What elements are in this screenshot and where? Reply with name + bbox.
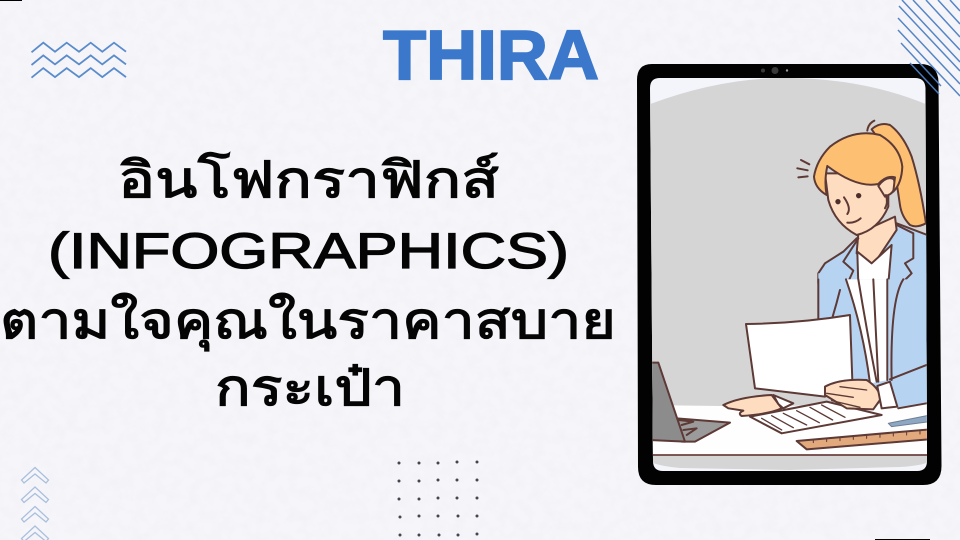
ponytail: [867, 121, 926, 226]
surprise marks: [797, 160, 809, 177]
heading line 4: กระเป๋า: [215, 360, 405, 416]
left hand: [723, 395, 782, 416]
paper: [746, 315, 852, 397]
icon: chevrons: [22, 468, 48, 540]
heading text: [0, 152, 616, 416]
lapels: [843, 225, 913, 282]
jacket: [818, 223, 930, 283]
collar: [857, 245, 892, 284]
face: [825, 173, 888, 235]
tablet frame: [637, 64, 942, 485]
shirt cuff: [877, 382, 897, 408]
title: THIRA: THIRA: [383, 16, 599, 94]
right hand: [825, 380, 880, 409]
ruler: [797, 429, 930, 449]
eyes and mouth: [835, 199, 841, 204]
neck: [857, 217, 897, 265]
jacket lower: [818, 279, 932, 408]
grey backdrop: [645, 78, 935, 470]
tablet camera: [761, 67, 788, 74]
ear: [878, 178, 895, 197]
pen: [888, 415, 930, 427]
laptop: [677, 418, 730, 442]
icon: dot grid: [398, 460, 478, 536]
heading line 1: อินโฟกราฟิกส์: [118, 152, 499, 208]
shirt: [846, 279, 888, 383]
icon: wave lines: [32, 43, 126, 78]
document on desk: [750, 402, 882, 433]
decorative diagonal lines: [898, 0, 960, 96]
heading line 3: ตามใจคุณในราคาสบาย: [0, 293, 616, 351]
desk: [645, 403, 935, 455]
woman: [797, 121, 932, 284]
tablet screen illustration: [645, 75, 935, 475]
hair: [814, 133, 902, 195]
heading line 2: (INFOGRAPHICS): [48, 223, 569, 279]
